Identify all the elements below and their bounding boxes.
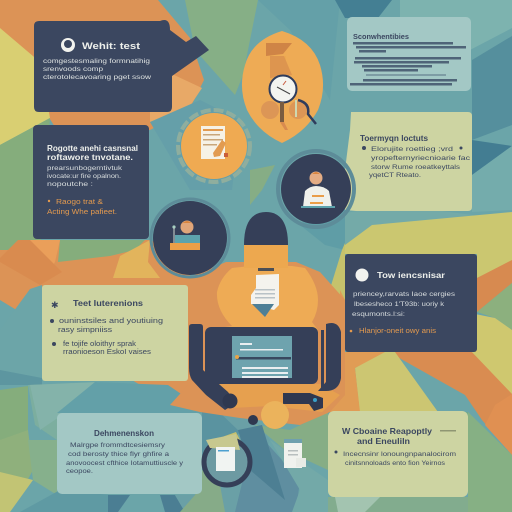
text block: lbesesheco 1'T93b: uoriy k bbox=[354, 301, 445, 308]
bullet text bbox=[50, 318, 163, 356]
bullet text: rraonioeson EskoI vaises bbox=[63, 349, 152, 356]
heading: Wehit: test bbox=[82, 41, 140, 51]
panel: yellow bottom-right bbox=[328, 411, 468, 497]
orange bullets: Raogo trat & bbox=[56, 199, 103, 206]
bullet text bbox=[362, 146, 471, 179]
neck box bbox=[244, 245, 288, 268]
heading: Sconwhentibies bbox=[353, 34, 409, 41]
icon: badge bbox=[356, 268, 368, 282]
text block: cod berosty thice flyr ghfire a bbox=[68, 451, 169, 458]
text block bbox=[352, 291, 456, 318]
orange bullets bbox=[47, 199, 117, 216]
icon: document circle bbox=[178, 110, 250, 182]
text block bbox=[66, 442, 184, 475]
bullet text: rasy simpniiss bbox=[58, 327, 113, 334]
bullet text bbox=[334, 450, 456, 467]
orange ball bbox=[261, 401, 289, 429]
icon: document bottom centre right bbox=[284, 439, 306, 468]
bullet text: cinitsnnoloads ento fion Yeirnos bbox=[345, 460, 446, 467]
icon: sparkle: ✱ bbox=[51, 300, 59, 310]
heading: Dehmenenskon bbox=[94, 429, 154, 438]
text block: prearsunbogerntivtuk bbox=[47, 166, 123, 172]
text block: ivocate:ur fire opalnon. bbox=[47, 174, 121, 180]
heading: roftawore tnvotane. bbox=[47, 153, 133, 162]
orange bullets: Acting Whe pafieet. bbox=[47, 209, 117, 216]
bullet text: storw Rume roeatkeyttals bbox=[371, 164, 461, 171]
bullet text: Incecnsinr lonoungnpanalocirom bbox=[343, 451, 456, 458]
icon: person badge bbox=[61, 38, 75, 52]
central figure: orange body bbox=[170, 212, 345, 425]
icon: screen cluster bottom centre bbox=[204, 432, 250, 485]
orange bullet bbox=[350, 330, 352, 332]
panel: pale blue top-right bbox=[347, 17, 471, 91]
panel: yellow right bbox=[345, 112, 472, 211]
bullet text: fe tojife oloithyr sprak bbox=[63, 341, 137, 348]
text block: anovoocest cfthice Iotamuttiuscle y bbox=[66, 460, 184, 467]
icon: clock in orange leaf bbox=[242, 31, 323, 143]
panel: dark right bbox=[345, 254, 477, 352]
tablet device bbox=[189, 323, 341, 425]
panel: dark left bbox=[33, 125, 149, 239]
text block bbox=[47, 166, 123, 188]
text block: cterotolecavoaring pget ssow bbox=[43, 75, 152, 81]
text block: srenvoods comp bbox=[43, 67, 104, 73]
heading: Teet Iuterenions bbox=[73, 299, 144, 308]
text lines bbox=[350, 42, 466, 86]
text block: ceopoe. bbox=[66, 468, 93, 475]
text block: nopoutche : bbox=[47, 182, 93, 188]
heading: W Cboaine Reapoptly bbox=[342, 426, 432, 436]
panel: dark right: Hlanjor-oneit owy anis bbox=[359, 328, 437, 335]
heading bbox=[342, 426, 432, 446]
bullet text: yqetCT Rteato. bbox=[369, 172, 421, 179]
heading: and Eneuliln bbox=[357, 436, 410, 446]
text block: Malrgpe frommdtcesiemsry bbox=[70, 442, 166, 449]
bullet text: ouninstsiles and youtiuing bbox=[59, 318, 163, 325]
head bbox=[244, 212, 288, 245]
text block bbox=[43, 59, 152, 81]
text block: esqumonts.l:si: bbox=[352, 311, 405, 318]
icon: doctor circle bbox=[278, 151, 354, 227]
text block: comgestesmaling formnatihig bbox=[43, 59, 150, 65]
heading: Tow iencsnisar bbox=[377, 270, 446, 280]
panel: dark top-left callout bbox=[34, 20, 209, 112]
bullet text: yropefternyriecnioarie fac bbox=[371, 155, 471, 162]
panel: pale blue bottom-left bbox=[57, 413, 202, 494]
heading: Toermyqn loctuts bbox=[360, 134, 429, 143]
bullet text: Elorujite roettieg ;vrd bbox=[371, 146, 454, 153]
text block: priencey,rarvats Iaoe cergies bbox=[353, 291, 456, 298]
heading bbox=[47, 144, 138, 162]
heading: Rogotte anehi casnsnal bbox=[47, 144, 138, 153]
panel: yellow left bbox=[42, 285, 188, 381]
document on chest bbox=[251, 274, 279, 317]
icon: presenter circle bbox=[151, 199, 229, 277]
